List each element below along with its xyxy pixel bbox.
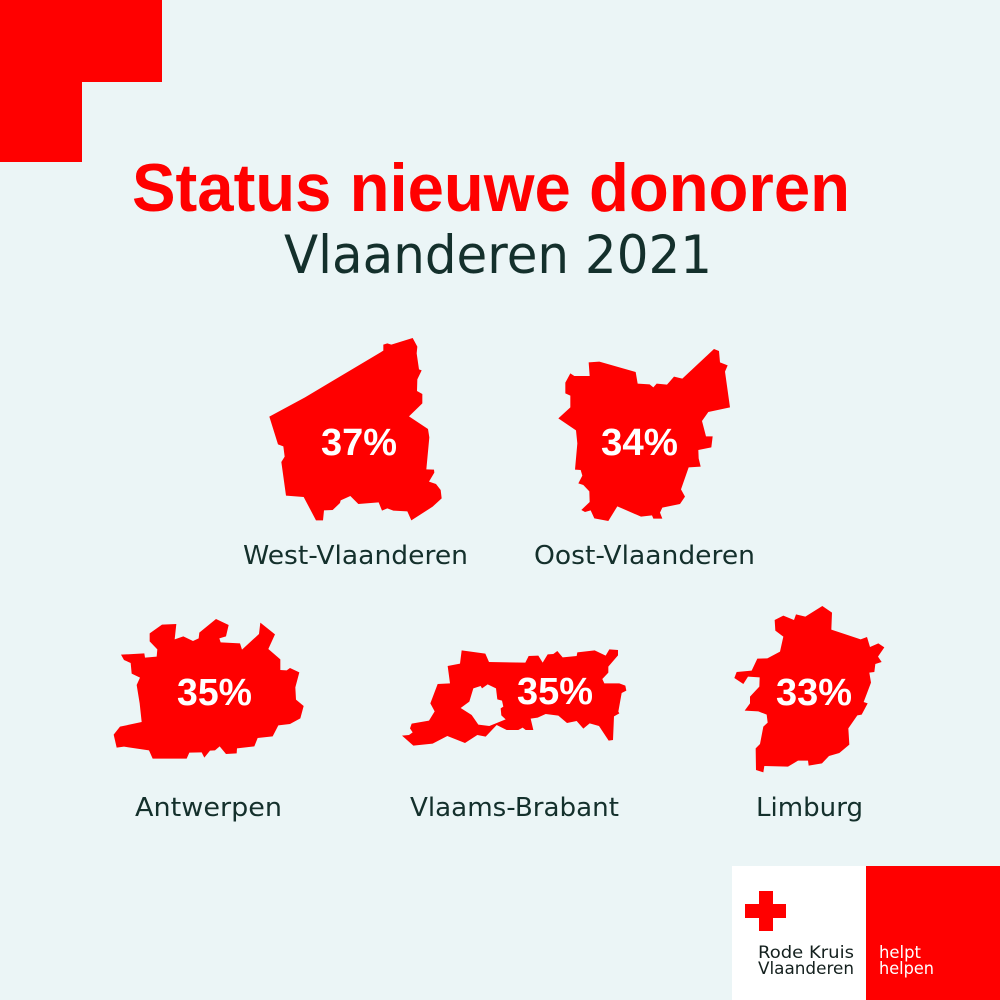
map: Limburg [734,606,884,772]
value: 35%: 35% [177,672,252,714]
panel: Limburg [734,606,884,823]
label: Antwerpen: Antwerpen [135,793,282,823]
panel: Vlaams-Brabant [402,649,626,823]
logo background [732,866,866,1000]
icon: red cross [745,891,786,931]
map: West-Vlaanderen [269,338,442,520]
logo block [732,866,1000,1000]
label: West-Vlaanderen: West-Vlaanderen [243,541,468,571]
logo text: Vlaanderen [758,959,854,979]
value: 33%: 33% [776,672,852,714]
subheading: Vlaanderen 2021: Vlaanderen 2021 [284,225,712,286]
panel: West-Vlaanderen [243,338,468,571]
value: 35%: 35% [517,671,593,713]
map: Antwerpen [114,619,304,759]
value: 34%: 34% [601,422,678,464]
panel: Antwerpen [114,619,304,823]
panel: Oost-Vlaanderen [534,349,755,571]
logo text: Rode Kruis [758,943,854,963]
map: Vlaams-Brabant [402,649,626,746]
tagline text: helpt [879,943,921,963]
value: 37%: 37% [321,422,397,464]
tagline text: helpen [879,959,934,979]
tagline background [866,866,1000,1000]
label: Limburg: Limburg [756,793,863,823]
title [132,150,850,286]
label: Vlaams-Brabant: Vlaams-Brabant [410,793,619,823]
map: Oost-Vlaanderen [558,349,730,521]
heading: Status nieuwe donoren: Status nieuwe donoren [132,150,850,226]
label: Oost-Vlaanderen: Oost-Vlaanderen [534,541,755,571]
corner block [0,0,162,162]
